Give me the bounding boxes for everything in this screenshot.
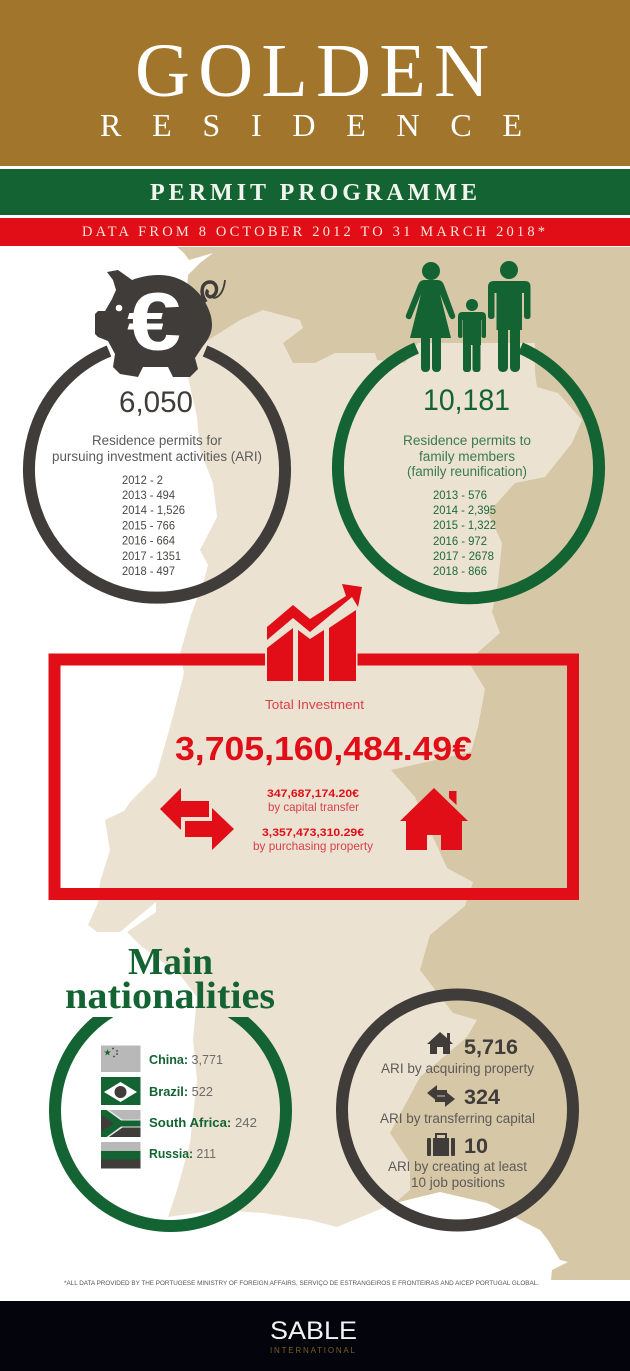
figure: 10: 10: [464, 1135, 488, 1158]
icon: briefcase: [427, 1133, 455, 1156]
label: total investment: Total Investment: [265, 697, 364, 712]
green band: permit programme: [0, 169, 630, 215]
yearly figures: 2013 - 576: [433, 488, 487, 502]
flag: China: [101, 1046, 140, 1072]
title: Residence: RESIDENCE: [100, 107, 522, 143]
yearly figures: [433, 488, 496, 578]
caption: creating jobs: [388, 1159, 527, 1190]
icon: family: [406, 261, 530, 372]
description: pursuing investment activities (ARI): [52, 449, 262, 464]
red band: date range: DATA FROM 8 OCTOBER 2012 TO 31 MARCH 2018*: [82, 224, 545, 240]
yearly figures: 2012 - 2: [122, 473, 163, 487]
flag: South Africa: [101, 1110, 140, 1137]
ring: ARI breakdown: [342, 994, 573, 1226]
description: [403, 433, 531, 479]
footnote: *ALL DATA PROVIDED BY THE PORTUGESE MINISTRY OF FOREIGN AFFAIRS, SERVIÇO DE ESTRANGEIROS E FRONTEIRAS AND AICEP PORTUGAL GLOBAL.: [64, 1280, 539, 1287]
ring: family permits: [338, 348, 599, 598]
yearly figures: 2015 - 766: [122, 518, 175, 532]
yearly figures: 2018 - 497: [122, 564, 175, 578]
description: (family reunification): [407, 464, 527, 479]
icon: small house: [427, 1032, 453, 1054]
description: Residence permits for: [92, 433, 222, 448]
yearly figures: 2016 - 664: [122, 534, 175, 548]
yearly figures: 2016 - 972: [433, 534, 487, 548]
logo: Sable International: SABLE: [270, 1317, 357, 1345]
flag: Brazil: [101, 1077, 140, 1105]
panel: ARI breakdown: [342, 994, 573, 1226]
breakdown: capital transfer: 347,687,174.20€: [267, 788, 359, 800]
title: Golden: GOLDEN: [135, 29, 489, 113]
caption: creating jobs: ARI by creating at least: [388, 1159, 527, 1174]
icon: small arrows: [427, 1085, 455, 1107]
nationality counts: Brazil: 522: [149, 1084, 213, 1099]
breakdown: capital transfer: [267, 788, 359, 814]
logo: Sable International: INTERNATIONAL: [270, 1346, 356, 1355]
yearly figures: 2017 - 1351: [122, 549, 181, 563]
yearly figures: 2017 - 2678: [433, 549, 494, 563]
figure: 324: 324: [464, 1086, 500, 1109]
yearly figures: 2018 - 866: [433, 564, 487, 578]
icon: house: [400, 788, 468, 850]
icon: rising bar chart: [267, 584, 362, 681]
map of Portugal and Spain: [88, 247, 630, 1280]
header banner: [0, 0, 630, 166]
nationality counts: South Africa: 242: [149, 1115, 257, 1130]
flag: Russia: [101, 1142, 140, 1168]
caption: transferring capital: ARI by transferring capital: [380, 1111, 535, 1126]
total: 6,050: 6,050: [119, 386, 193, 419]
green band: permit programme: PERMIT PROGRAMME: [150, 180, 477, 206]
breakdown: capital transfer: by capital transfer: [268, 800, 359, 814]
caption: acquiring property: ARI by acquiring property: [381, 1061, 534, 1076]
nationality counts: Russia: 211: [149, 1146, 216, 1161]
footer bar: [0, 1301, 630, 1371]
nationality counts: China: 3,771: [149, 1052, 223, 1067]
panel: main nationalities: [55, 941, 286, 1226]
description: Residence permits to: [403, 433, 531, 448]
breakdown: purchasing property: by purchasing property: [253, 839, 373, 853]
panel: family permits: [338, 261, 599, 598]
icon: piggy bank with euro: €: [127, 276, 181, 368]
heading: nationalities: [65, 975, 275, 1017]
flag: China: ★: [104, 1048, 112, 1058]
ring: investment permits: [29, 351, 285, 598]
amount: total: 3,705,160,484.49€: [175, 730, 472, 767]
panel: total investment: [54, 584, 573, 894]
yearly figures: [122, 473, 185, 578]
panel: investment permits: [29, 270, 285, 598]
description: [52, 433, 262, 464]
caption: creating jobs: 10 job positions: [411, 1175, 505, 1190]
ring: nationalities: [55, 995, 286, 1226]
breakdown: purchasing property: [253, 827, 373, 853]
nationality counts: [149, 1052, 257, 1161]
heading: [65, 941, 275, 1017]
yearly figures: 2014 - 2,395: [433, 503, 496, 517]
heading: Main: [128, 941, 213, 983]
red frame: [54, 660, 573, 894]
yearly figures: 2013 - 494: [122, 488, 175, 502]
total: 10,181: 10,181: [423, 384, 510, 417]
icon: piggy bank with euro: [95, 270, 225, 377]
description: family members: [419, 449, 515, 464]
icon: exchange arrows: [160, 788, 234, 850]
red band: date range: [0, 218, 630, 246]
logo: Sable International: [270, 1317, 357, 1355]
yearly figures: 2014 - 1,526: [122, 503, 185, 517]
breakdown: purchasing property: 3,357,473,310.29€: [262, 827, 364, 839]
yearly figures: 2015 - 1,322: [433, 518, 496, 532]
figure: 5,716: 5,716: [464, 1036, 518, 1059]
